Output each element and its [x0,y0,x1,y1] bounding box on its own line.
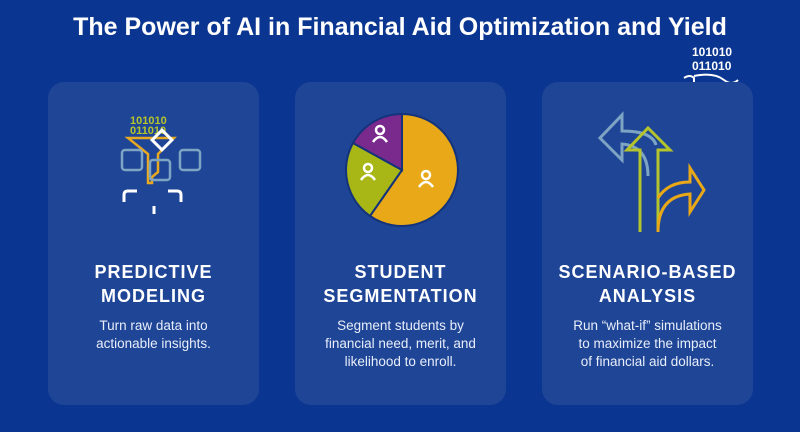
icon: binary corner: 011010 [692,59,732,73]
text: Run “what-if” simulations [573,318,722,333]
title: The Power of AI in Financial Aid Optimization and Yield [73,13,727,41]
text: financial need, merit, and [325,336,476,351]
heading [94,262,213,306]
icon: data funnel [120,115,202,214]
heading: SCENARIO-BASED [558,262,736,282]
text: Turn raw data into [99,318,208,333]
heading: PREDICTIVE [94,262,213,282]
text: of financial aid dollars. [581,354,714,369]
panel: scenario-based analysis [542,82,753,405]
text: Segment students by [337,318,464,333]
heading: SEGMENTATION [323,286,478,306]
text: to maximize the impact [578,336,717,351]
heading [558,262,736,306]
heading [323,262,478,306]
icon: branching arrows [598,111,706,232]
heading: ANALYSIS [599,286,696,306]
text [573,318,722,369]
heading: MODELING [101,286,206,306]
icon: binary corner: 101010 [692,45,732,59]
panel: student segmentation [295,82,506,405]
icon: data funnel: 011010 [130,125,166,137]
panel: predictive modeling [48,82,259,405]
icon: pie chart [345,113,459,227]
text: likelihood to enroll. [345,354,456,369]
icon: data funnel: 101010 [130,115,167,127]
text [325,318,476,369]
text [96,318,211,351]
heading: STUDENT [354,262,446,282]
text: actionable insights. [96,336,211,351]
